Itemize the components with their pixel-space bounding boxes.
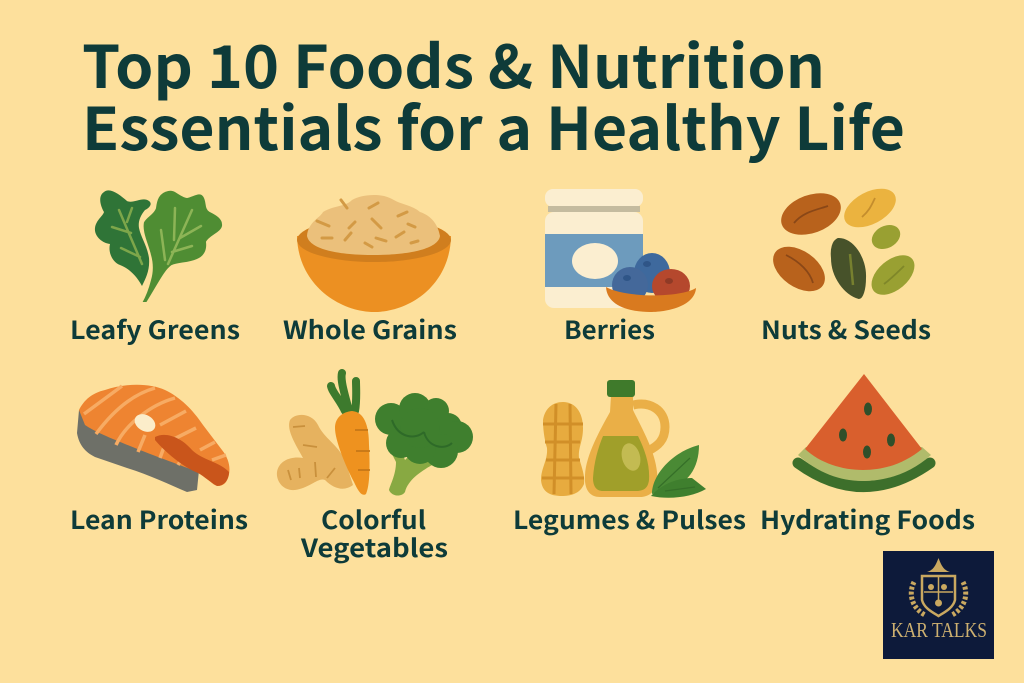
icon: salmon steak	[77, 385, 229, 492]
label: Vegetables	[300, 529, 448, 565]
item: berries	[545, 189, 696, 347]
label	[300, 501, 448, 565]
label: Legumes & Pulses	[513, 501, 746, 537]
title: Top 10 Foods & Nutrition	[82, 20, 825, 105]
icon: jar with berries	[545, 189, 696, 312]
item: hydrating foods	[760, 374, 975, 537]
title: Essentials for a Healthy Life	[82, 82, 905, 167]
label: Hydrating Foods	[760, 501, 975, 537]
logo: Kar Talks badge	[883, 551, 994, 659]
item: whole grains	[283, 195, 457, 347]
title	[82, 20, 905, 167]
item: legumes and pulses	[513, 380, 746, 537]
label: Lean Proteins	[70, 501, 248, 537]
label: Nuts & Seeds	[761, 311, 931, 347]
item: lean proteins	[70, 385, 248, 537]
icon: bowl of grains	[297, 195, 451, 312]
icon: crest	[911, 558, 966, 616]
label: Berries	[564, 311, 655, 347]
icon: peanut, oil bottle, leaves	[541, 380, 706, 498]
icon: leaves	[95, 190, 223, 303]
brand name: KAR TALKS	[891, 618, 987, 642]
label: Leafy Greens	[70, 311, 240, 347]
icon: ginger, carrot, broccoli	[277, 373, 473, 496]
icon: watermelon slice	[798, 374, 931, 486]
item: colorful vegetables	[277, 373, 473, 565]
label: Colorful	[321, 501, 426, 537]
item: nuts and seeds	[761, 181, 931, 347]
item: leafy greens	[70, 190, 240, 347]
icon: nuts and seeds	[765, 181, 922, 303]
label: Whole Grains	[283, 311, 457, 347]
